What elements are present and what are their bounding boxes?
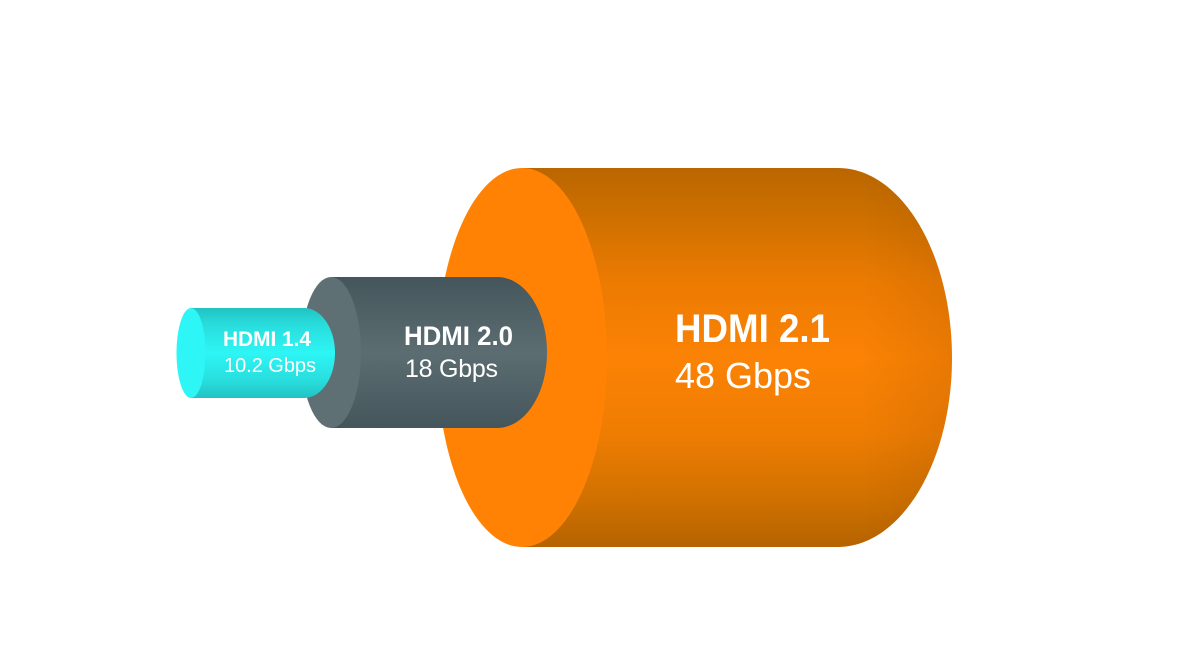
end cap: HDMI 2.1 xyxy=(437,168,607,547)
body: HDMI 2.0 cylinder side xyxy=(331,277,547,428)
cylinder: HDMI 2.1 xyxy=(437,168,952,547)
label: HDMI 1.4 xyxy=(223,328,316,377)
cylinder: HDMI 2.0 xyxy=(301,277,547,428)
label: HDMI 1.4: 10.2 Gbps xyxy=(224,355,316,377)
end cap: HDMI 2.0 xyxy=(301,277,361,428)
label: HDMI 2.1: HDMI 2.1 xyxy=(675,307,830,351)
body: HDMI 1.4 cylinder side xyxy=(191,308,335,398)
shading: HDMI 2.1 right edge xyxy=(522,168,952,547)
end cap: HDMI 1.4 xyxy=(176,308,206,398)
label: HDMI 2.1: 48 Gbps xyxy=(675,355,811,396)
label: HDMI 2.0 xyxy=(404,321,513,383)
label: HDMI 2.0: 18 Gbps xyxy=(405,355,498,383)
label: HDMI 2.0: HDMI 2.0 xyxy=(404,321,513,351)
label: HDMI 1.4: HDMI 1.4 xyxy=(223,328,311,351)
body: HDMI 2.1 cylinder side xyxy=(522,168,952,547)
cylinder: HDMI 1.4 xyxy=(176,308,335,398)
label: HDMI 2.1 xyxy=(675,307,830,396)
